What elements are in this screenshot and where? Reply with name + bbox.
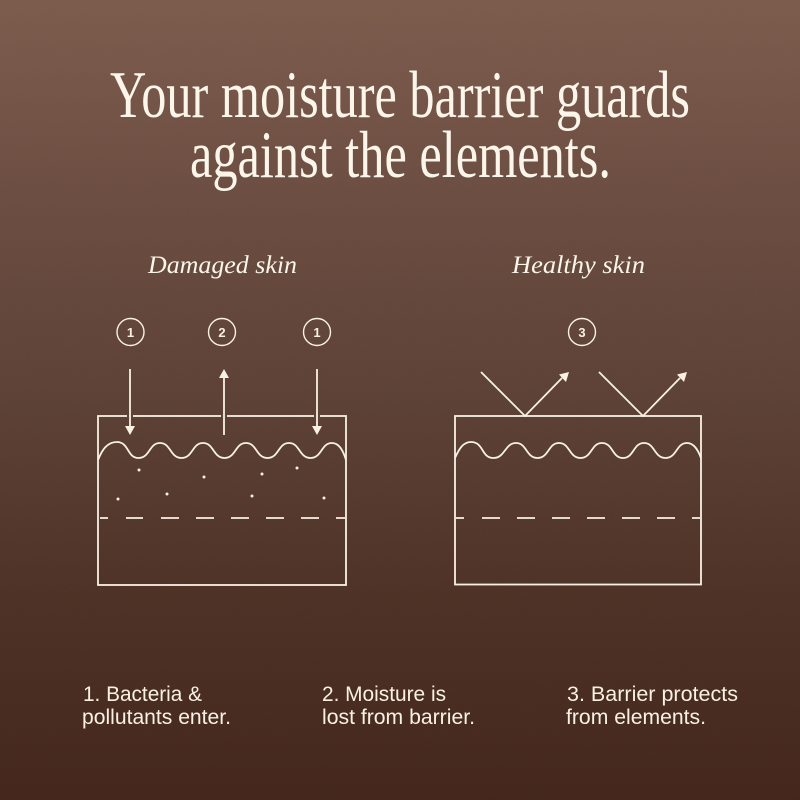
heading: healthy skin: Healthy skin — [511, 252, 645, 279]
caption 3 — [566, 683, 738, 729]
reflected arrow right — [599, 372, 687, 416]
wavy barrier line — [98, 442, 346, 460]
diagram: healthy skin — [455, 318, 701, 584]
number badge 1 right — [304, 318, 330, 346]
arrow down right — [312, 369, 322, 435]
number badge 1 right: 1 — [313, 325, 321, 340]
number badge 2: 2 — [218, 325, 226, 340]
caption 2: lost from barrier. — [322, 706, 475, 729]
dashed line — [100, 517, 345, 519]
diagram: damaged skin — [98, 318, 346, 585]
number badge 1 left — [117, 318, 144, 346]
title: against the elements. — [190, 118, 611, 192]
caption 3: 3. Barrier protects — [567, 683, 738, 706]
title — [110, 58, 690, 192]
caption 3: from elements. — [566, 706, 706, 729]
particles — [116, 466, 326, 500]
reflected arrow left — [481, 372, 569, 416]
number badge 3 — [568, 318, 596, 346]
arrow down left — [125, 369, 135, 435]
number badge 1 left: 1 — [127, 325, 134, 340]
caption 1 — [82, 683, 231, 729]
caption 2 — [322, 683, 475, 729]
dashed line — [456, 517, 700, 519]
caption 2: 2. Moisture is — [322, 683, 446, 706]
skin box — [98, 416, 346, 585]
heading: damaged skin: Damaged skin — [147, 252, 297, 279]
caption 1: 1. Bacteria & — [83, 683, 202, 706]
wavy barrier line — [455, 442, 701, 458]
number badge 2 — [208, 318, 236, 346]
arrow up — [219, 369, 229, 435]
caption 1: pollutants enter. — [82, 706, 231, 729]
number badge 3: 3 — [578, 325, 586, 340]
skin box — [455, 416, 701, 584]
